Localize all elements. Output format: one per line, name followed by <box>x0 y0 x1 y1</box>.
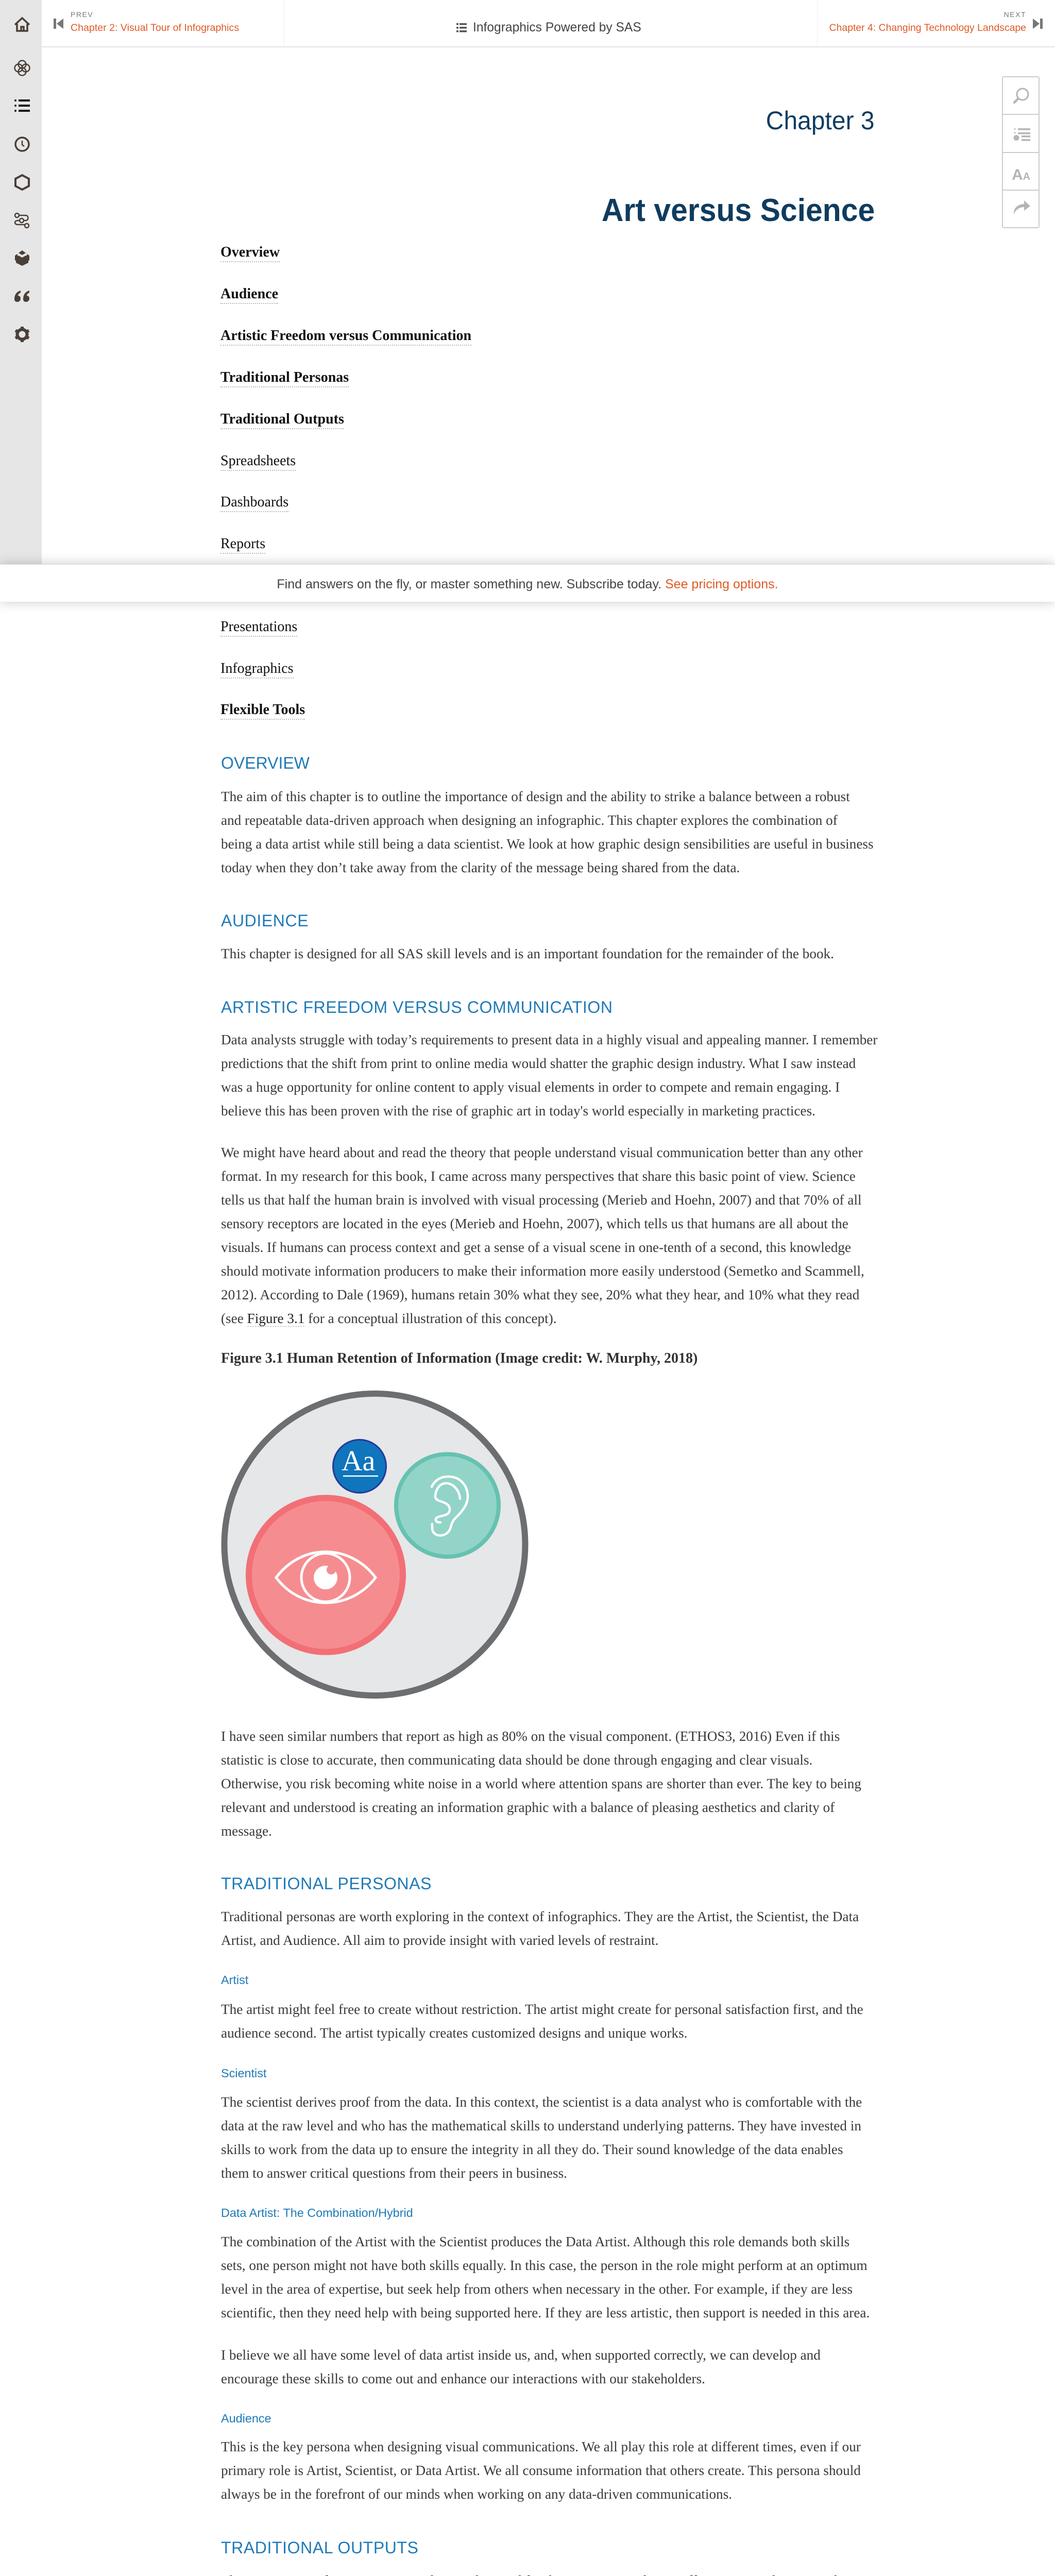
icon: eye <box>276 1552 376 1603</box>
paragraph: inner data artist <box>221 2347 821 2386</box>
paragraph: scientist: skills to work from the data up to ensure the integrity in all they do. Their sound knowledge of the data enables <box>221 2142 843 2157</box>
paragraph: artistic freedom 2 <box>221 1145 864 1327</box>
next label: NEXT <box>1004 10 1026 19</box>
paragraph: artist: The artist might feel free to create without restriction. The artist might create for personal satisfaction first, and the <box>221 2002 863 2017</box>
paragraph: scientist: them to answer critical questions from their peers in business. <box>221 2165 567 2181</box>
hearing circle <box>396 1454 499 1557</box>
paragraph: audience persona: always be in the forefront of our minds when working on any data-driven communications. <box>221 2486 732 2502</box>
paragraph: similar numbers: message. <box>221 1823 272 1839</box>
table of contents: Infographics <box>220 660 294 676</box>
icon: next arrow <box>1033 19 1043 29</box>
table of contents: Dashboards <box>220 494 288 510</box>
paragraph: artistic freedom 2: (see Figure 3.1 for a conceptual illustration of this concept). <box>221 1311 557 1326</box>
table of contents: Audience <box>220 286 278 302</box>
next chapter title: Chapter 4: Changing Technology Landscape <box>829 22 1026 33</box>
icon: box <box>15 250 29 266</box>
paragraph: audience: This chapter is designed for all SAS skill levels and is an important foundation for the remainder of the book. <box>221 946 834 961</box>
chapter title: Art versus Science <box>602 193 875 228</box>
heading: overview: OVERVIEW <box>221 754 310 772</box>
paragraph: artistic freedom 1: was a huge opportunity for online content to apply visual elements in order to compete and remain engaging. I <box>221 1079 840 1095</box>
icon: clover <box>14 61 30 75</box>
paragraph: artistic freedom 2: tells us that half the human brain is involved with visual processing (Merieb and Hoehn, 2007) and that 70% of all <box>221 1192 862 1208</box>
paragraph: artistic freedom 1 <box>221 1032 878 1118</box>
paragraph: overview: and repeatable data-driven approach when designing an infographic. This chapter explores the combination of <box>221 812 838 828</box>
table of contents: Spreadsheets <box>220 453 296 469</box>
icon: contents list <box>456 23 467 32</box>
paragraph: similar numbers <box>221 1728 861 1839</box>
paragraph: artistic freedom 2: visuals. If humans can process context and get a sense of a visual scene in one-tenth of a second, this knowledge <box>221 1240 851 1255</box>
subheading: artist: Artist <box>221 1973 248 1987</box>
book title text: Infographics Powered by SAS <box>473 21 641 35</box>
paragraph: similar numbers: I have seen similar numbers that report as high as 80% on the visual component. (ETHOS3, 2016) Even if this <box>221 1728 840 1744</box>
paragraph: inner data artist: I believe we all have some level of data artist inside us, and, when supported correctly, we can develop and <box>221 2347 821 2363</box>
reading circle: Aa <box>342 1445 375 1477</box>
icon: search <box>1014 89 1028 103</box>
paragraph: audience persona <box>221 2439 861 2502</box>
paragraph: similar numbers: statistic is close to accurate, then communicating data should be done through engaging and clear visuals. <box>221 1752 812 1768</box>
paragraph: audience persona: primary role is Artist, Scientist, or Data Artist. We all consume information that others create. This persona should <box>221 2463 861 2478</box>
icon: add to list <box>1014 128 1030 141</box>
paragraph: inner data artist: encourage these skills to come out and enhance our interactions with our stakeholders. <box>221 2371 705 2386</box>
heading: artistic freedom: ARTISTIC FREEDOM VERSUS COMMUNICATION <box>221 998 613 1016</box>
paragraph: artist <box>221 2002 863 2041</box>
book title <box>456 21 641 35</box>
paragraph: data artist: The combination of the Artist with the Scientist produces the Data Artist. Although this role demands both skills <box>221 2234 849 2249</box>
table of contents: Reports <box>220 536 265 552</box>
table of contents: Presentations <box>220 619 297 635</box>
table of contents: Flexible Tools <box>220 702 305 718</box>
icon: font size: AA <box>1012 166 1030 183</box>
subheading: data artist: Data Artist: The Combination/Hybrid <box>221 2206 413 2219</box>
heading: traditional outputs: TRADITIONAL OUTPUTS <box>221 2538 419 2557</box>
icon: hexagon <box>15 175 29 190</box>
toc items <box>220 244 471 720</box>
paragraph: artistic freedom 2: 2012). According to Dale (1969), humans retain 30% what they see, 20% what they hear, and 10% what they read <box>221 1287 859 1302</box>
right toolbar <box>1002 76 1040 228</box>
paragraph: artist: audience second. The artist typically creates customized designs and unique works. <box>221 2025 687 2041</box>
icon: list <box>14 99 30 112</box>
icon: home <box>15 18 29 31</box>
seeing circle <box>249 1498 403 1652</box>
table of contents: Traditional Outputs <box>220 411 344 427</box>
paragraph: audience persona: This is the key persona when designing visual communications. We all play this role at different times, even if our <box>221 2439 861 2454</box>
heading: audience: AUDIENCE <box>221 911 309 930</box>
subscribe banner <box>0 564 1055 602</box>
prev label: PREV <box>71 10 93 19</box>
paragraph: scientist: The scientist derives proof from the data. In this context, the scientist is a data analyst who is comfortable with the <box>221 2094 862 2110</box>
paragraph: artistic freedom 1: Data analysts struggle with today’s requirements to present data in a highly visual and appealing manner. I remember <box>221 1032 877 1047</box>
paragraph: artistic freedom 2: We might have heard about and read the theory that people understand visual communication better than any other <box>221 1145 863 1160</box>
icon: clock <box>15 138 29 151</box>
paragraph: scientist <box>221 2094 862 2181</box>
table of contents <box>220 244 471 720</box>
prev link <box>54 10 239 33</box>
heading: traditional personas: TRADITIONAL PERSONAS <box>221 1874 432 1893</box>
sidebar navigation <box>0 0 42 564</box>
paragraph: personas intro: Traditional personas are worth exploring in the context of infographics. They are the Artist, the Scientist, the Data <box>221 1909 859 1924</box>
figure caption: Figure 3.1 Human Retention of Information (Image credit: W. Murphy, 2018) <box>221 1350 697 1366</box>
subheading: scientist: Scientist <box>221 2066 266 2080</box>
paragraph: artistic freedom 1: predictions that the shift from print to online media would shatter the graphic design industry. What I saw instead <box>221 1056 856 1071</box>
subscribe banner: Find answers on the fly, or master something new. Subscribe today. See pricing options. <box>277 577 778 591</box>
paragraph: similar numbers: relevant and understood is creating an information graphic with a balance of pleasing aesthetics and clarity of <box>221 1800 835 1815</box>
next link <box>829 10 1043 33</box>
figure: human retention of information <box>222 1391 529 1699</box>
top navigation bar <box>42 0 1055 47</box>
paragraph: overview: being a data artist while still being a data scientist. We look at how graphic design sensibilities are useful in business <box>221 836 874 852</box>
paragraph: scientist: data at the raw level and who has the mathematical skills to understand underlying patterns. They have invested in <box>221 2118 861 2133</box>
prev chapter title: Chapter 2: Visual Tour of Infographics <box>71 22 239 33</box>
paragraph: data artist: sets, one person might not have both skills equally. In this case, the person in the role might perform at an optimum <box>221 2258 867 2273</box>
paragraph: similar numbers: Otherwise, you risk becoming white noise in a world where attention spans are shorter than ever. The key to being <box>221 1776 861 1791</box>
icon: path <box>15 213 29 228</box>
paragraph: data artist: scientific, then they need help with being supported here. If they are less artistic, then support is needed in this area. <box>221 2305 870 2320</box>
icon: previous arrow <box>54 19 63 29</box>
outer circle <box>225 1394 525 1696</box>
table of contents: Traditional Personas <box>220 369 349 385</box>
table of contents: Artistic Freedom versus Communication <box>220 328 471 344</box>
subheading: audience persona: Audience <box>221 2412 271 2425</box>
icon: gear <box>15 327 29 342</box>
icon: quote <box>14 291 29 302</box>
table of contents: Overview <box>220 244 280 260</box>
paragraph: artistic freedom 1: believe this has been proven with the rise of graphic art in today's world especially in marketing practices. <box>221 1103 815 1118</box>
paragraph: overview: today when they don’t take away from the clarity of the message being shared from the data. <box>221 860 740 875</box>
icon: ear <box>432 1477 468 1535</box>
paragraph: artistic freedom 2: sensory receptors are located in the eyes (Merieb and Hoehn, 2007), which tells us that humans are all about the <box>221 1216 848 1231</box>
paragraph: personas intro: Artist, and Audience. All aim to provide insight with varied levels of restraint. <box>221 1933 658 1948</box>
paragraph: artistic freedom 2: format. In my research for this book, I came across many perspectives that share this basic point of view. Science <box>221 1168 856 1184</box>
paragraph: data artist <box>221 2234 870 2320</box>
icon: share <box>1014 200 1030 214</box>
paragraph: overview: The aim of this chapter is to outline the importance of design and the ability to strike a balance between a robust <box>221 789 850 804</box>
paragraph: artistic freedom 2: should motivate information producers to make their information more easily understood (Semetko and Scammell, <box>221 1263 864 1279</box>
chapter number: Chapter 3 <box>766 106 875 135</box>
table of contents: Email <box>220 578 255 594</box>
paragraph: data artist: level in the area of expertise, but seek help from others when necessary in the other. For example, if they are less <box>221 2281 853 2297</box>
reading circle <box>333 1439 386 1493</box>
paragraph: personas intro <box>221 1909 859 1948</box>
paragraph: overview <box>221 789 874 875</box>
